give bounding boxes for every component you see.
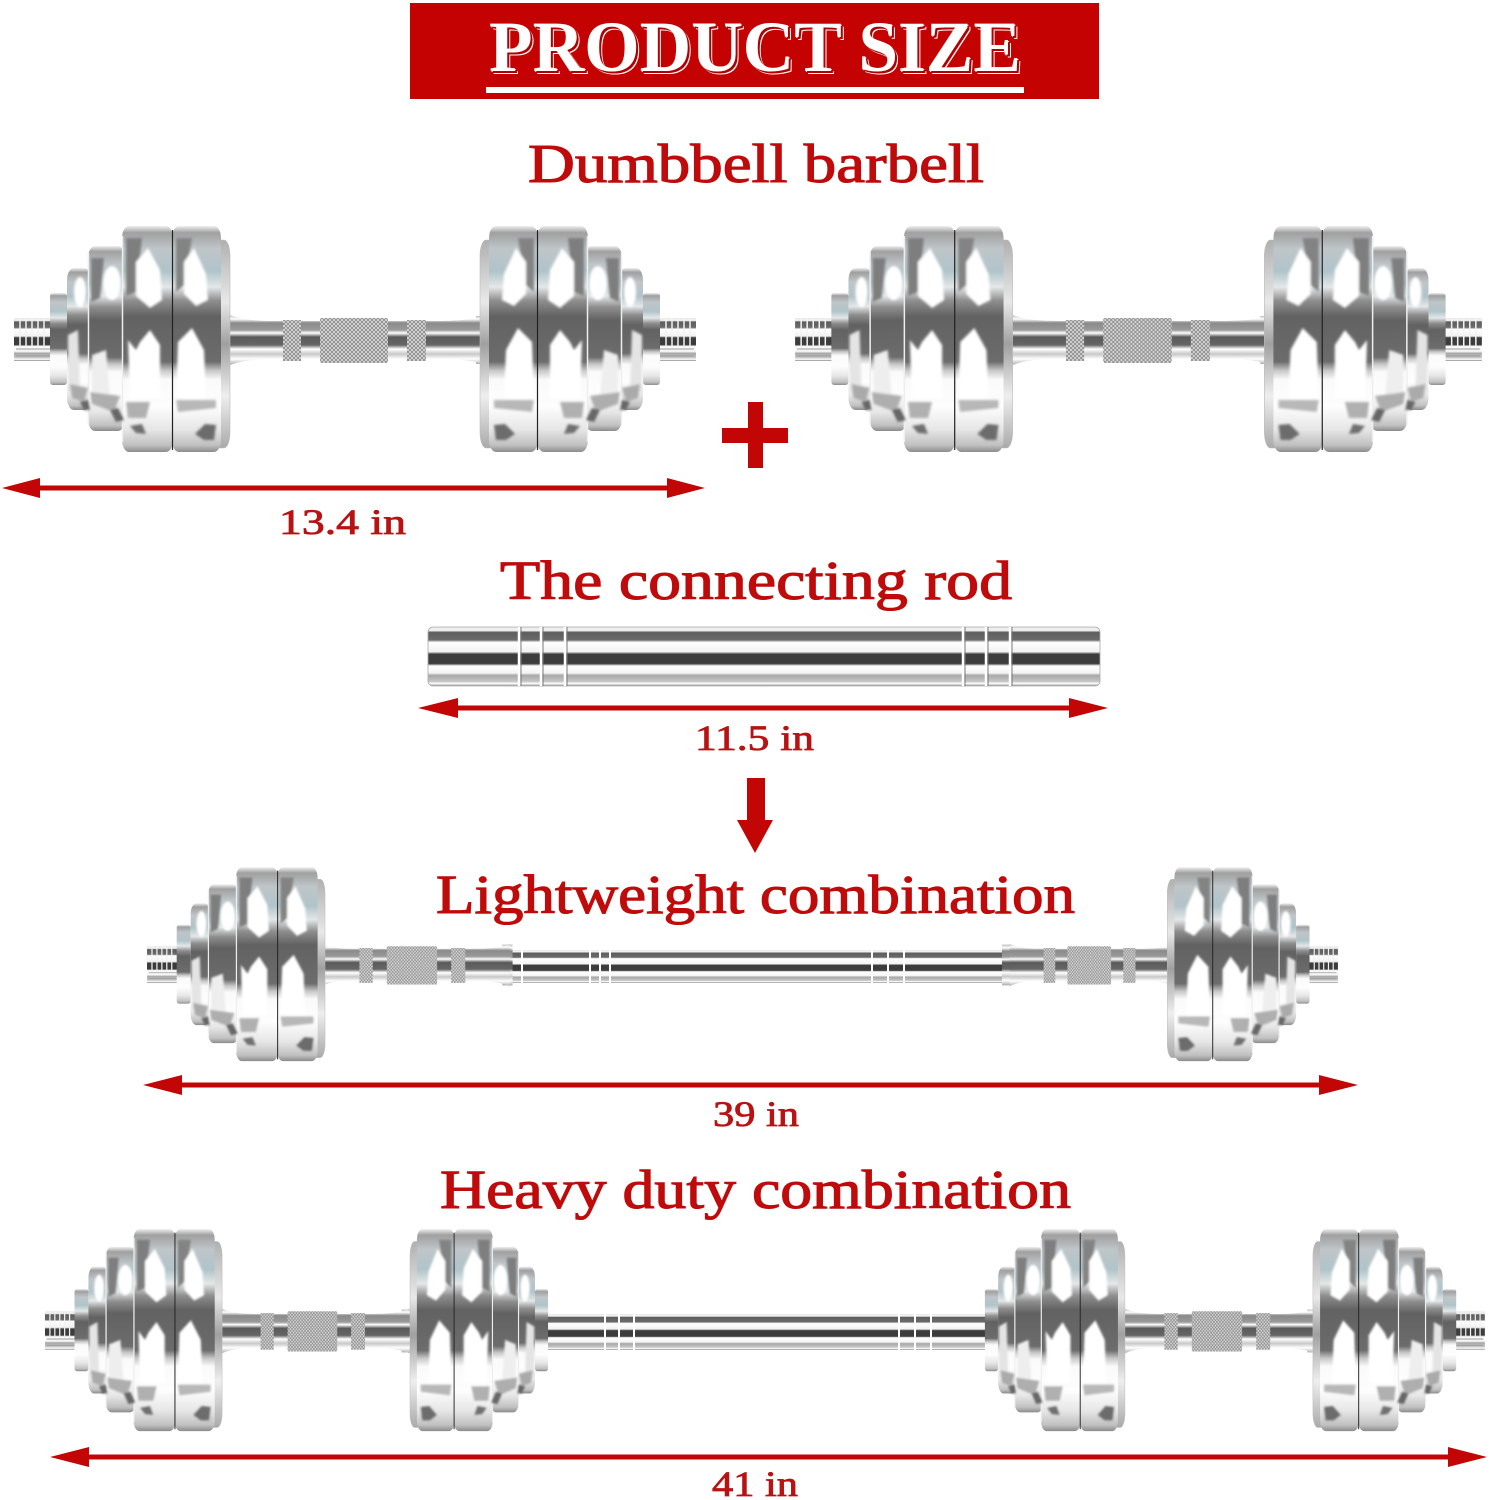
arrow: dumbbell length xyxy=(2,478,705,498)
heading: dumbbell barbell: Dumbbell barbell xyxy=(528,133,984,194)
arrow: heavy duty length xyxy=(50,1447,1487,1467)
dumbbell right xyxy=(795,226,1482,452)
connecting rod xyxy=(428,627,1100,686)
title: PRODUCT SIZE xyxy=(489,7,1021,87)
dimension: 11.5 in: 11.5 in xyxy=(695,718,814,758)
heading: lightweight combination: Lightweight combination xyxy=(436,864,1075,925)
arrow: lightweight length xyxy=(143,1075,1358,1095)
arrow: down xyxy=(737,778,773,853)
dumbbell left xyxy=(14,226,696,452)
lightweight barbell xyxy=(147,867,1338,1061)
icon: plus sign xyxy=(722,402,788,468)
dimension: 39 in: 39 in xyxy=(713,1094,799,1134)
heading: the connecting rod: The connecting rod xyxy=(500,550,1012,611)
title banner xyxy=(410,3,1099,99)
dimension: 13.4 in: 13.4 in xyxy=(279,502,406,542)
arrow: rod length xyxy=(418,698,1108,718)
heavy duty barbell xyxy=(45,1229,1485,1431)
heading: heavy duty combination: Heavy duty combination xyxy=(440,1159,1071,1220)
